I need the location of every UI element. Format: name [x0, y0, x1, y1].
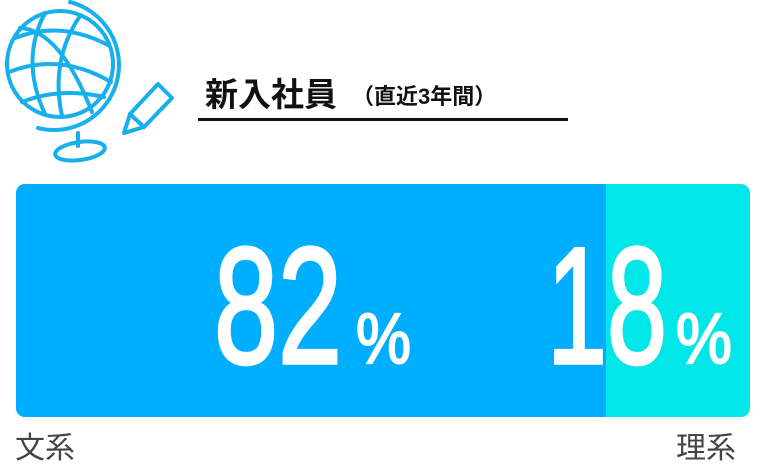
- bar chart: [16, 184, 750, 417]
- title underline: [198, 118, 568, 121]
- value: 82%: %: [356, 300, 411, 379]
- value: 18%: %: [676, 300, 732, 379]
- title: 新入社員: [205, 76, 337, 113]
- value: 18%: 18: [547, 214, 667, 399]
- icon: globe with pencil: [7, 2, 172, 163]
- title: （直近3年間）: [352, 84, 496, 109]
- title: [205, 76, 496, 113]
- value: 82%: 82: [214, 214, 342, 399]
